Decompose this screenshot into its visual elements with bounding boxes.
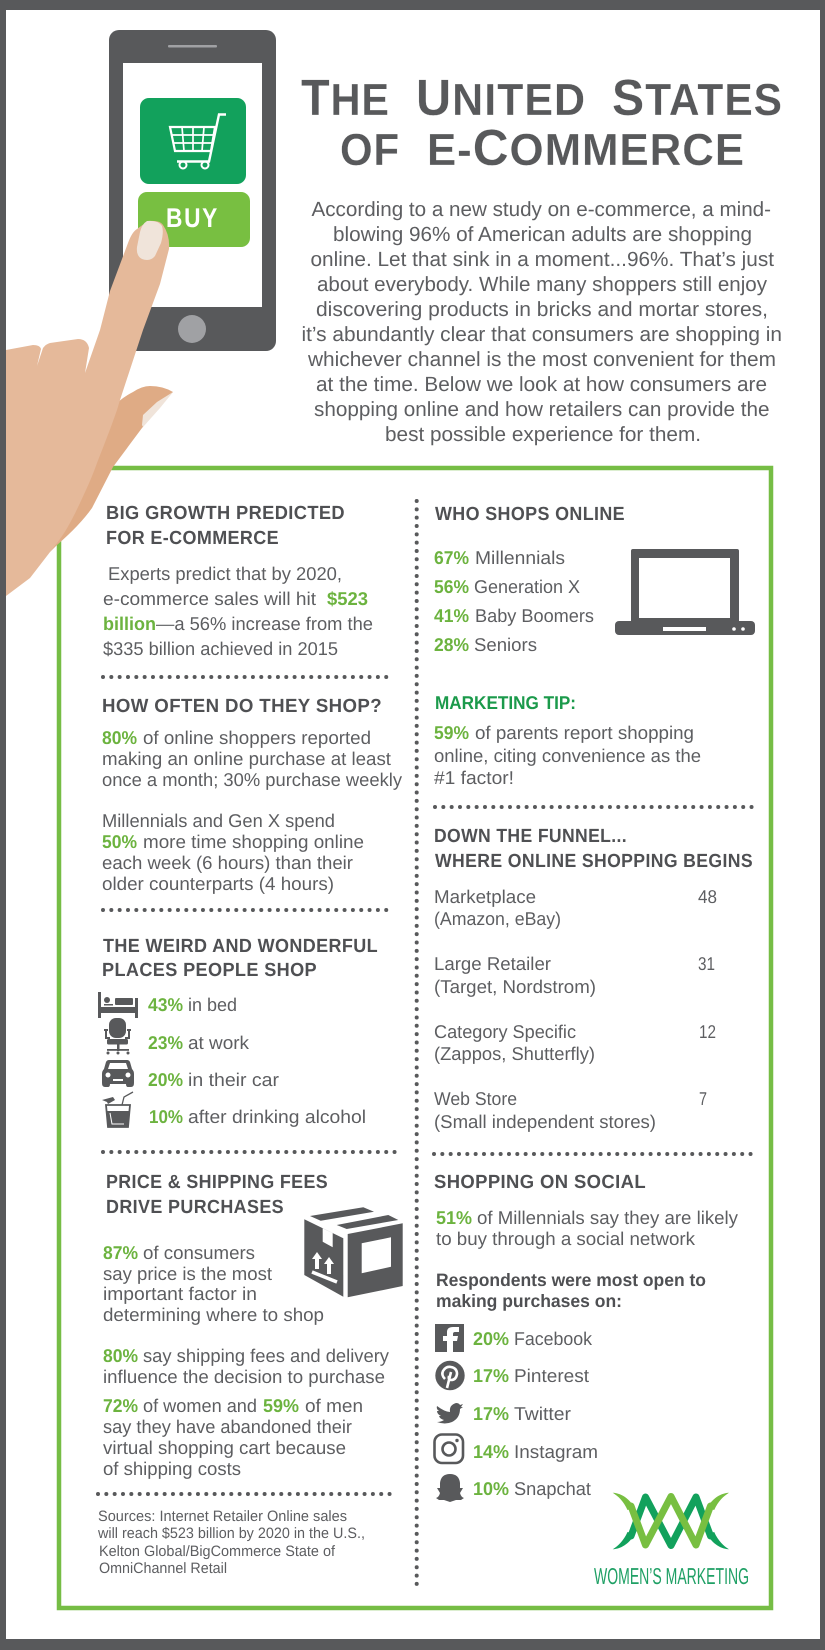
text: places stats: 20% (148, 1069, 183, 1090)
icon: bed (98, 992, 138, 1018)
icon: snapchat (436, 1474, 464, 1502)
text: social network stats (473, 1328, 598, 1499)
icon: office chair (104, 1018, 131, 1054)
heading: big growth: FOR E-COMMERCE (106, 528, 279, 549)
text: generations: 67% (434, 547, 469, 568)
text: social network stats: Instagram (514, 1441, 598, 1462)
heading: who shops online: WHO SHOPS ONLINE (435, 504, 625, 525)
intro paragraph: shopping online and how retailers can provide the (314, 398, 770, 421)
table: shopping starting points: (Target, Nordstrom) (434, 976, 596, 997)
heading: places (102, 936, 378, 981)
heading: how often: HOW OFTEN DO THEY SHOP? (102, 696, 382, 717)
marketing tip: online, citing convenience as the (434, 745, 701, 766)
panel: price and shipping (103, 1172, 403, 1479)
text: sources: will reach $523 billion by 2020 in the U.S., (97, 1525, 365, 1542)
text: generations: 41% (434, 605, 469, 626)
table: shopping starting points (434, 886, 717, 1132)
intro paragraph: discovering products in bricks and mortar stores, (316, 298, 768, 321)
marketing tip: 59% (434, 722, 469, 743)
intro paragraph: whichever channel is the most convenient for them (307, 348, 776, 371)
text: places stats: in bed (188, 994, 237, 1015)
panel: shopping on social (434, 1172, 739, 1502)
text: sources (97, 1508, 365, 1577)
text: price and shipping body: of shipping costs (103, 1458, 241, 1479)
heading: big growth (106, 503, 345, 549)
buy button: BUY (166, 203, 219, 233)
text: social network stats: 17% (473, 1403, 509, 1424)
text: price and shipping body: influence the decision to purchase (103, 1366, 385, 1387)
text: how often body: 50% (102, 831, 137, 852)
text: price and shipping body: of men (305, 1395, 363, 1416)
icon: facebook (435, 1324, 464, 1352)
intro paragraph: it’s abundantly clear that consumers are shopping in (302, 323, 782, 346)
text: social intro (436, 1207, 739, 1311)
icon: pinterest (435, 1361, 465, 1390)
text: how often body (102, 727, 403, 894)
intro paragraph (302, 198, 782, 446)
cart button (140, 98, 246, 184)
marketing tip: #1 factor! (434, 767, 514, 788)
text: places stats: 43% (148, 994, 183, 1015)
text: social network stats: 14% (473, 1441, 509, 1462)
text: big growth body: —a 56% increase from the (156, 613, 373, 634)
panel: down the funnel (434, 826, 753, 1132)
icon: twitter (437, 1403, 463, 1424)
text: social intro: making purchases on: (436, 1291, 622, 1311)
text: price and shipping body: 87% (103, 1242, 138, 1263)
text: price and shipping body: say shipping fees and delivery (143, 1345, 390, 1366)
text: how often body: once a month; 30% purchase weekly (102, 769, 403, 790)
table: shopping starting points: (Zappos, Shutterfly) (434, 1043, 595, 1064)
text: generations: 28% (434, 634, 469, 655)
text: price and shipping body: 59% (263, 1395, 299, 1416)
icon: car (102, 1060, 134, 1087)
text: generations: Millennials (475, 547, 565, 568)
title: E-COMMERCE (427, 119, 745, 176)
marketing tip (434, 692, 701, 788)
intro paragraph: about everybody. While many shoppers still enjoy (317, 273, 768, 296)
text: price and shipping body: 80% (103, 1345, 138, 1366)
title: THE (301, 69, 390, 126)
icon: laptop (615, 549, 755, 635)
heading: price and shipping: DRIVE PURCHASES (106, 1197, 284, 1218)
table: shopping starting points: Web Store (434, 1088, 517, 1109)
text: places stats: 10% (149, 1106, 183, 1127)
text: big growth body (103, 563, 373, 659)
text: sources: OmniChannel Retail (99, 1560, 227, 1577)
text: price and shipping body: say they have abandoned their (103, 1416, 352, 1437)
table: shopping starting points: 31 (698, 953, 715, 974)
text: sources: Sources: Internet Retailer Online sales (98, 1508, 347, 1525)
marketing tip: of parents report shopping (475, 722, 694, 743)
text: sources: Kelton Global/BigCommerce State of (99, 1543, 336, 1560)
table: shopping starting points: Category Specific (434, 1021, 576, 1042)
text: generations (434, 547, 594, 655)
text: social network stats: Pinterest (514, 1365, 589, 1386)
text: generations: Baby Boomers (475, 605, 594, 626)
heading: price and shipping: PRICE & SHIPPING FEES (106, 1172, 328, 1193)
table: shopping starting points: Large Retailer (434, 953, 551, 974)
dotted dividers (98, 501, 756, 1590)
text: how often body: each week (6 hours) than their (102, 852, 353, 873)
heading: funnel: WHERE ONLINE SHOPPING BEGINS (435, 851, 753, 872)
heading: social: SHOPPING ON SOCIAL (434, 1172, 646, 1193)
text: price and shipping body: of consumers (143, 1242, 255, 1263)
heading: places: THE WEIRD AND WONDERFUL (103, 936, 378, 957)
icon: instagram (434, 1434, 463, 1463)
text: how often body: of online shoppers reported (143, 727, 371, 748)
text: places stats: after drinking alcohol (188, 1106, 366, 1127)
text: how often body: Millennials and Gen X spend (102, 810, 335, 831)
text: big growth body: $523 (327, 588, 368, 609)
text: price and shipping body (103, 1242, 390, 1479)
text: generations: 56% (434, 576, 469, 597)
panel: who shops online (434, 504, 755, 788)
text: social network stats: 17% (473, 1365, 509, 1386)
text: social network stats: 10% (473, 1478, 509, 1499)
text: social intro: 51% (436, 1207, 472, 1228)
text: places stats: at work (188, 1032, 250, 1053)
heading: places: PLACES PEOPLE SHOP (102, 960, 317, 981)
intro paragraph: at the time. Below we look at how consumers are (316, 373, 767, 396)
title: UNITED (416, 69, 586, 126)
logo: women's marketing (594, 1493, 749, 1589)
table: shopping starting points: Marketplace (434, 886, 536, 907)
text: big growth body: $335 billion achieved in 2015 (103, 638, 338, 659)
table: shopping starting points: 7 (699, 1088, 707, 1109)
text: big growth body: Experts predict that by 2020, (108, 563, 342, 584)
text: price and shipping body: important factor in (103, 1283, 257, 1304)
text: price and shipping body: virtual shopping cart because (103, 1437, 346, 1458)
green content frame (59, 468, 771, 1608)
text: price and shipping body: of women and (143, 1395, 257, 1416)
text: price and shipping body: say price is the most (103, 1263, 272, 1284)
heading: funnel: DOWN THE FUNNEL... (434, 826, 627, 847)
intro paragraph: online. Let that sink in a moment...96%. That’s just (310, 248, 774, 271)
heading: price and shipping (106, 1172, 328, 1218)
table: shopping starting points: (Small independent stores) (434, 1111, 656, 1132)
panel: how often (102, 696, 403, 894)
text: how often body: 80% (102, 727, 137, 748)
text: big growth body: billion (103, 613, 156, 634)
intro paragraph: blowing 96% of American adults are shopping (333, 223, 752, 246)
marketing tip: MARKETING TIP: (435, 692, 576, 713)
icon: shipping box (304, 1207, 403, 1297)
text: how often body: more time shopping online (143, 831, 364, 852)
icon: smartphone (109, 30, 276, 351)
text: how often body: older counterparts (4 hours) (102, 873, 334, 894)
text: social network stats: Snapchat (514, 1478, 591, 1499)
buy button (138, 192, 250, 247)
text: places stats: 23% (148, 1032, 183, 1053)
heading: big growth: BIG GROWTH PREDICTED (106, 503, 345, 524)
text: generations: Generation X (474, 576, 580, 597)
text: generations: Seniors (474, 634, 537, 655)
text: social network stats: 20% (473, 1328, 509, 1349)
text: price and shipping body: determining where to shop (103, 1304, 324, 1325)
text: social intro: of Millennials say they are likely (477, 1207, 739, 1228)
intro paragraph: According to a new study on e-commerce, a mind- (312, 198, 771, 221)
intro paragraph: best possible experience for them. (385, 423, 701, 446)
panel: big growth (103, 503, 373, 659)
text: how often body: making an online purchase at least (102, 748, 391, 769)
table: shopping starting points: 12 (699, 1021, 716, 1042)
text: social network stats: Facebook (514, 1328, 593, 1349)
text: social intro: to buy through a social network (436, 1228, 696, 1249)
icon: hand pressing button (6, 221, 173, 596)
panel: weird and wonderful places (98, 936, 378, 1127)
title: STATES (612, 69, 783, 126)
table: shopping starting points: 48 (698, 886, 717, 907)
icon: drink (102, 1092, 133, 1127)
table: shopping starting points: (Amazon, eBay) (434, 908, 561, 929)
text: places stats: in their car (188, 1069, 279, 1090)
title (301, 69, 783, 176)
text: price and shipping body: 72% (103, 1395, 138, 1416)
heading: funnel (434, 826, 753, 872)
text: big growth body: e-commerce sales will hit (103, 588, 316, 609)
text: social network stats: Twitter (514, 1403, 571, 1424)
text: places stats (148, 994, 366, 1127)
title: OF (340, 124, 400, 175)
text: social intro: Respondents were most open to (436, 1270, 706, 1290)
